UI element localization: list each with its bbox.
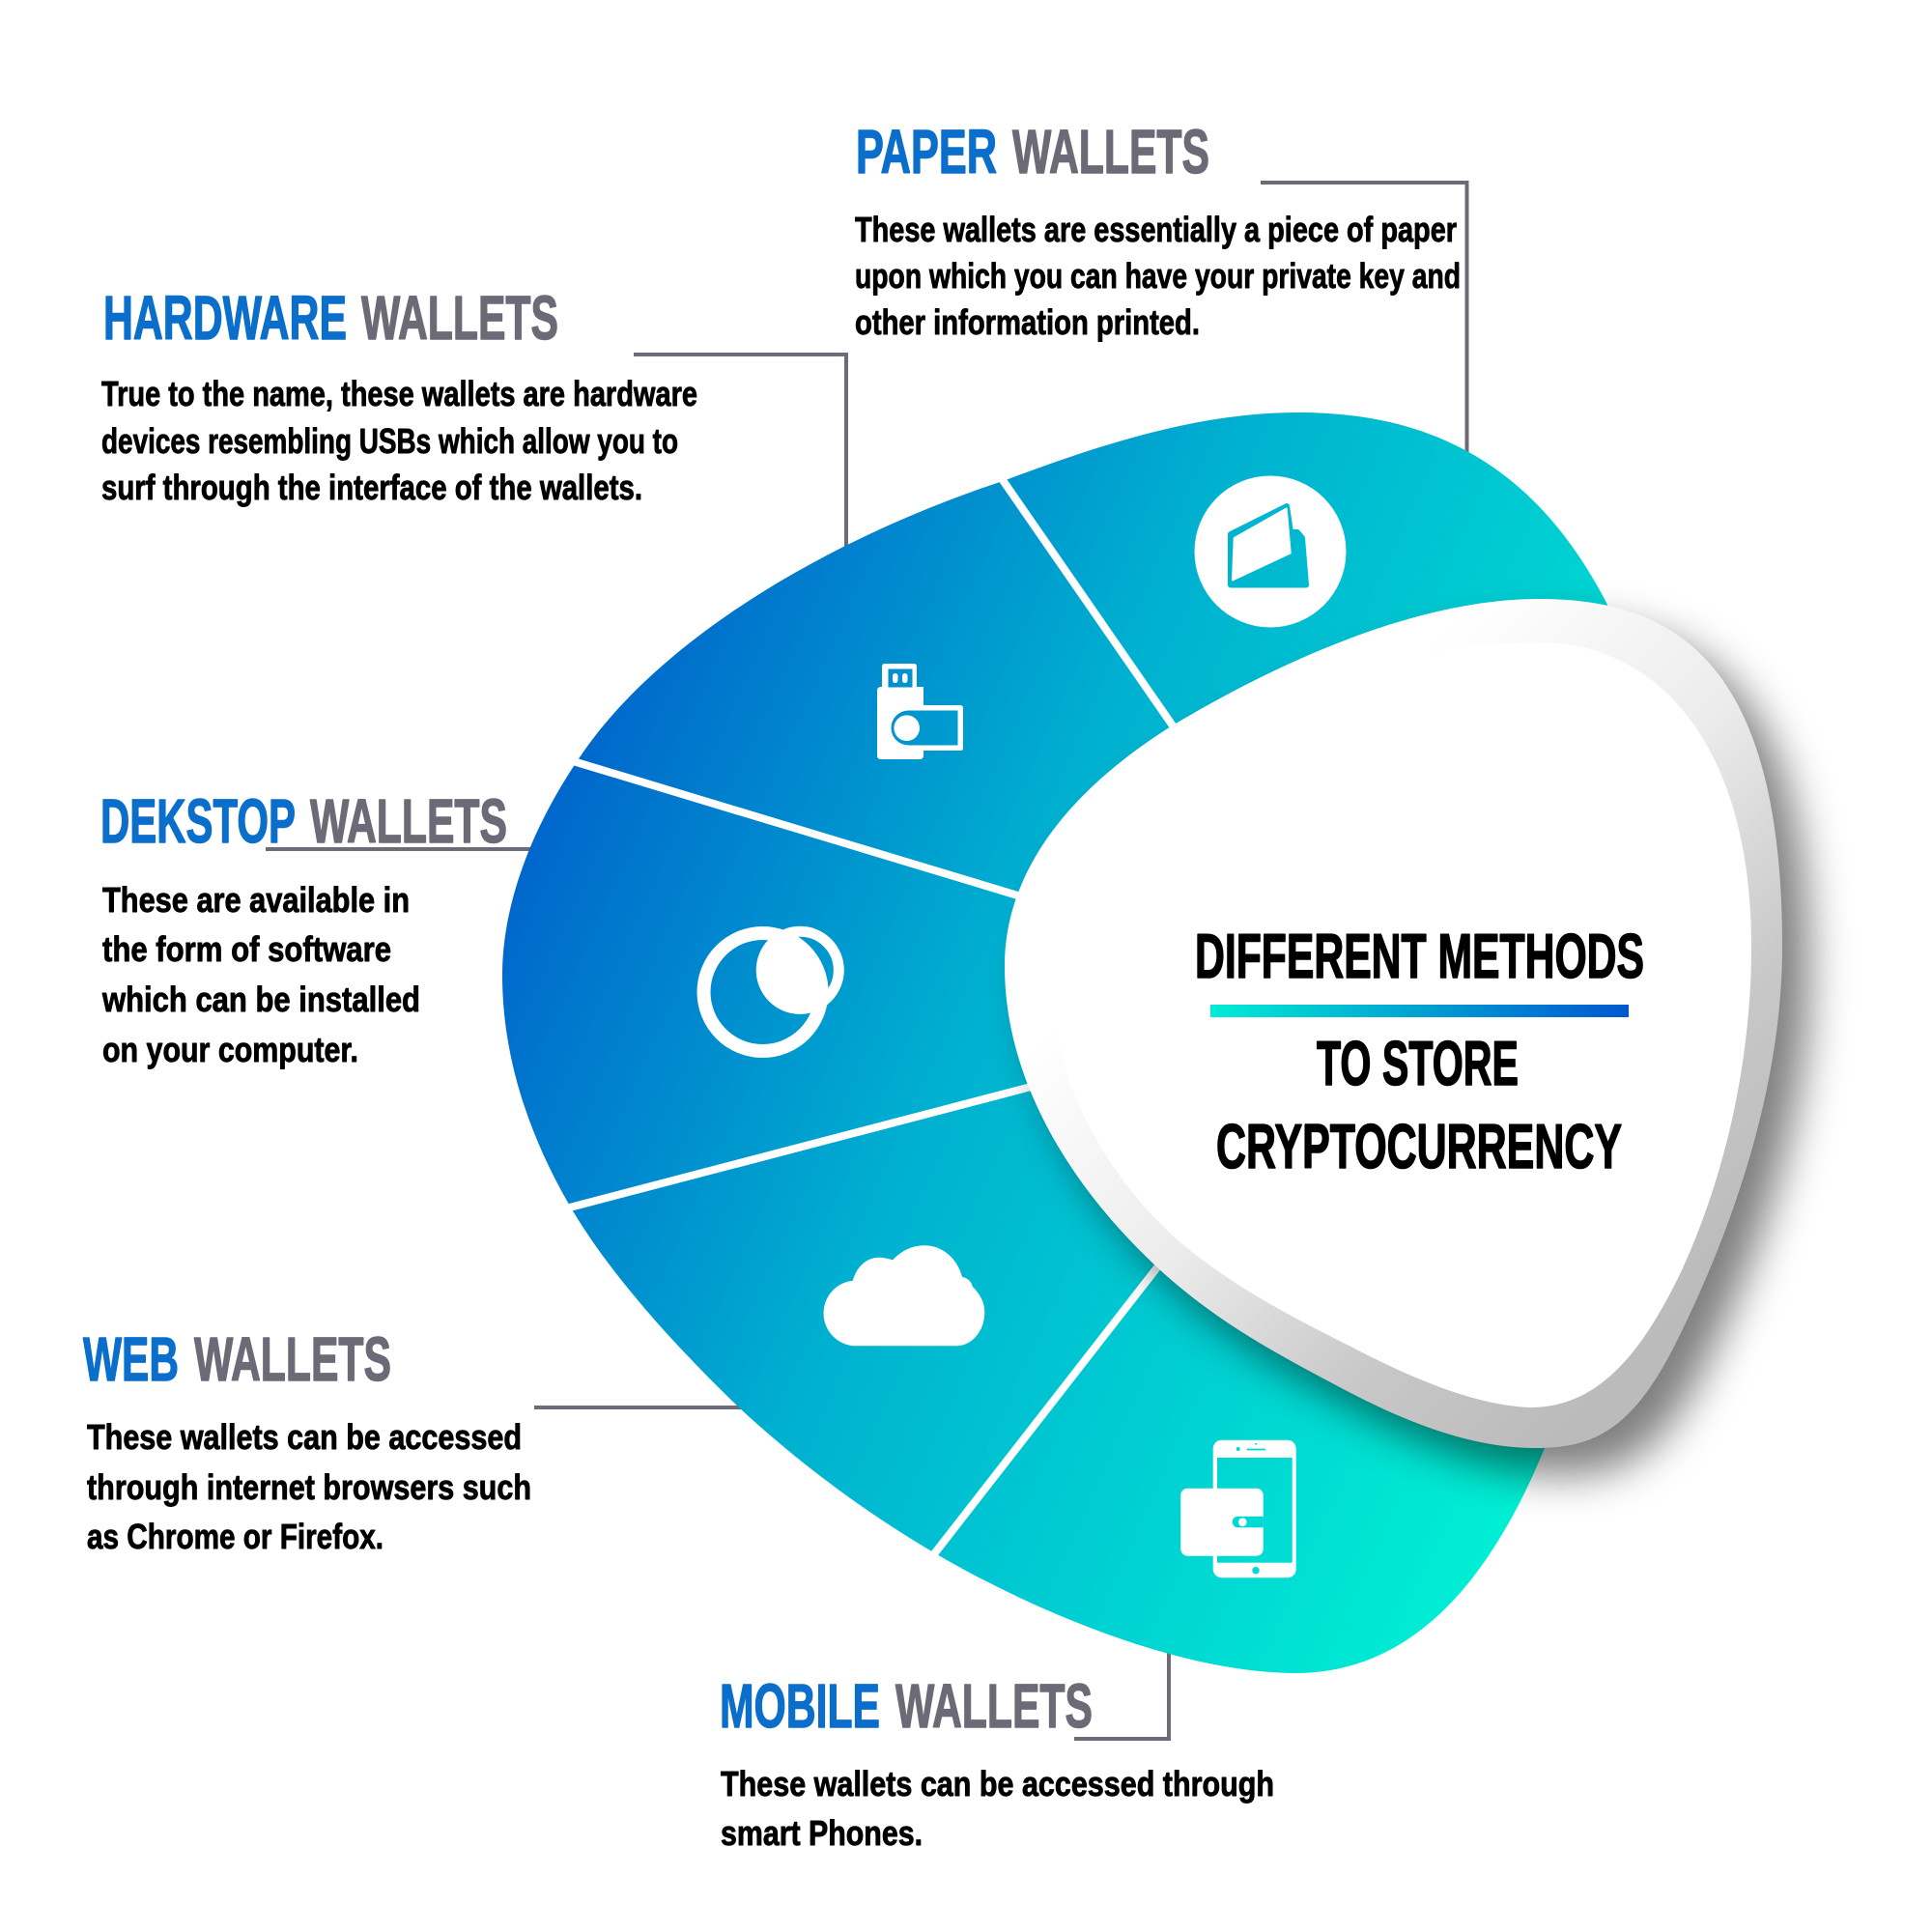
connector: paper wallets <box>1261 183 1466 454</box>
heading: web wallets: WALLETS <box>194 1324 391 1394</box>
connector: hardware wallets <box>634 355 846 553</box>
text: mobile wallets <box>721 1764 1274 1853</box>
text: paper wallets: other information printed. <box>855 302 1200 342</box>
inner white shape <box>1049 642 1751 1407</box>
text: paper wallets: upon which you can have your private key and <box>855 256 1461 296</box>
text: web wallets: through internet browsers such <box>87 1467 531 1507</box>
title: different methods to store cryptocurrency: TO STORE <box>1317 1028 1519 1098</box>
heading: web wallets: WEB <box>83 1324 179 1394</box>
heading: hardware wallets: WALLETS <box>361 283 558 353</box>
gradient bar <box>1210 1005 1629 1017</box>
text: hardware wallets: surf through the interface of the wallets. <box>101 468 642 507</box>
text: hardware wallets: True to the name, these wallets are hardware <box>101 374 697 413</box>
icon: mobile wallet <box>1180 1440 1296 1577</box>
outer ring <box>1005 599 1782 1448</box>
text: hardware wallets: devices resembling USBs which allow you to <box>101 421 678 461</box>
icon: USB drive <box>877 664 963 759</box>
text: web wallets: as Chrome or Firefox. <box>87 1517 384 1556</box>
text: mobile wallets: smart Phones. <box>721 1813 923 1853</box>
heading: paper wallets: WALLETS <box>1012 117 1209 186</box>
text: desktop wallets: which can be installed <box>101 980 420 1019</box>
heading: hardware wallets: HARDWARE <box>103 283 347 353</box>
icon: paper wallet <box>1194 475 1347 628</box>
text: hardware wallets <box>101 374 697 507</box>
connector: desktop wallets <box>266 847 531 851</box>
text: web wallets: These wallets can be accessed <box>87 1417 522 1457</box>
text: desktop wallets: on your computer. <box>102 1030 358 1069</box>
text: desktop wallets <box>101 880 420 1069</box>
heading: paper wallets: PAPER <box>856 117 997 186</box>
central shape: shadow, ring and white disc <box>1005 599 1809 1475</box>
connector: mobile wallets <box>1074 1652 1169 1739</box>
divider lines between segments <box>566 480 1179 1555</box>
icon: cloud <box>824 1245 984 1346</box>
heading: mobile wallets: WALLETS <box>895 1671 1093 1741</box>
title: different methods to store cryptocurrency: DIFFERENT METHODS <box>1195 921 1644 991</box>
text: paper wallets <box>855 210 1461 342</box>
heading: paper wallets <box>856 117 1209 186</box>
text: desktop wallets: the form of software <box>102 929 391 969</box>
heading: mobile wallets <box>720 1671 1093 1741</box>
heading: desktop wallets: WALLETS <box>310 786 507 856</box>
text: paper wallets: These wallets are essentially a piece of paper <box>855 210 1457 249</box>
icon: desktop circles <box>703 926 844 1051</box>
connector: web wallets <box>534 1406 744 1409</box>
text: desktop wallets: These are available in <box>102 880 410 920</box>
title: different methods to store cryptocurrency <box>1195 921 1644 1181</box>
text: web wallets <box>87 1417 531 1556</box>
text: mobile wallets: These wallets can be accessed through <box>721 1764 1274 1804</box>
title: different methods to store cryptocurrency: CRYPTOCURRENCY <box>1216 1111 1622 1181</box>
heading: desktop wallets: DEKSTOP <box>100 786 296 856</box>
segmented gradient blob <box>502 412 1662 1673</box>
blob shape <box>502 412 1662 1673</box>
heading: web wallets <box>83 1324 391 1394</box>
heading: mobile wallets: MOBILE <box>720 1671 880 1741</box>
drop shadow <box>1032 626 1809 1475</box>
